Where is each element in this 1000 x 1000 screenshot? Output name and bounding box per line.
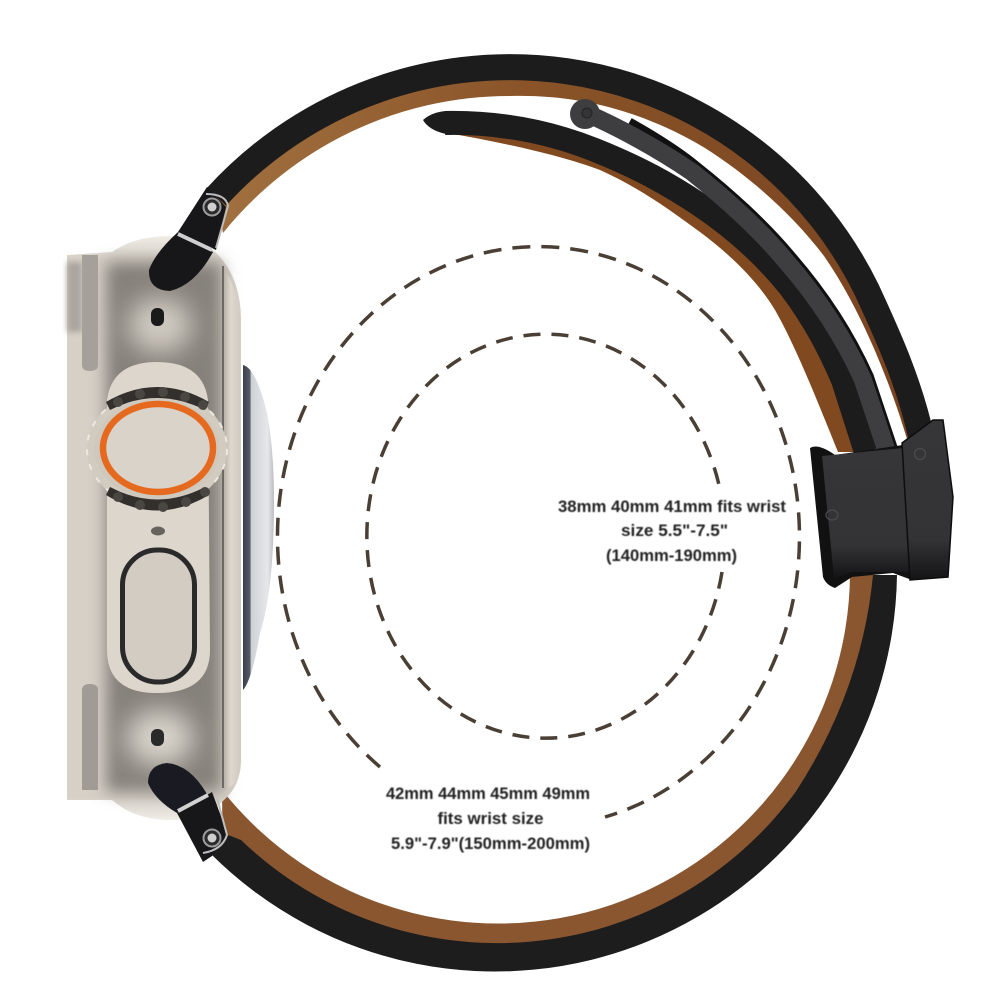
crown bottom dark rim — [106, 487, 209, 510]
watch case — [67, 236, 274, 820]
clasp right block — [902, 420, 953, 580]
lug paddle bottom — [148, 763, 207, 813]
speaker hole bottom — [151, 729, 164, 746]
orange ring — [103, 404, 213, 492]
size label: large watches: 5.9"-7.9"(150mm-200mm) — [391, 835, 590, 853]
bottom lug — [148, 763, 228, 862]
size label: small watches — [558, 498, 787, 565]
clasp dot right — [914, 448, 926, 460]
size label: small watches: 38mm 40mm 41mm fits wrist — [558, 498, 787, 516]
side button — [122, 550, 194, 682]
clasp dot left — [826, 510, 838, 520]
size label: small watches: (140mm-190mm) — [606, 547, 737, 565]
top strap leather lining — [216, 67, 925, 442]
lower light patch — [126, 710, 194, 766]
crown guard — [107, 362, 210, 693]
size label: large watches: fits wrist size — [438, 810, 544, 828]
bottom strap leather lining — [222, 575, 883, 959]
bolt top — [204, 198, 220, 216]
left side stripe lower — [82, 684, 98, 790]
guard dot — [151, 526, 165, 536]
case shading — [106, 262, 222, 792]
strap end top — [178, 187, 226, 250]
size label: large watches — [386, 785, 590, 853]
buckle tail leather lining — [445, 123, 866, 452]
left edge shade — [67, 262, 82, 332]
speaker hole top — [151, 308, 164, 326]
watch glass side — [243, 365, 274, 690]
bolt bottom — [204, 830, 220, 846]
folding clasp arm edge — [628, 126, 890, 452]
clasp left block — [810, 445, 912, 588]
silver stripe bottom — [178, 795, 208, 811]
right side rail — [224, 268, 241, 790]
silver edge bottom — [203, 798, 227, 853]
crown serrations — [87, 391, 227, 507]
top strap black outer — [216, 67, 922, 440]
clasp left face — [822, 448, 909, 578]
bottom strap black outer — [212, 575, 897, 972]
crown knurl bumps — [113, 387, 210, 512]
digital crown — [87, 387, 227, 512]
bolt centre top — [208, 202, 216, 212]
folding clasp arm — [570, 99, 888, 455]
clasp arm pivot — [582, 108, 592, 118]
strap end bottom — [177, 792, 228, 862]
crown base — [87, 390, 227, 508]
size label: small watches: size 5.5"-7.5" — [621, 522, 728, 540]
silver stripe top — [178, 234, 212, 250]
case body — [67, 236, 241, 820]
bolt centre bottom — [208, 834, 216, 842]
tail tip — [423, 111, 452, 135]
clasp — [810, 420, 953, 588]
silver edge top — [206, 194, 228, 248]
rail divider — [222, 266, 224, 788]
large wrist-size dashed circle — [277, 247, 799, 817]
size label: large watches: 42mm 44mm 45mm 49mm — [386, 785, 590, 803]
upper light patch — [128, 297, 192, 353]
crown top dark rim — [106, 387, 209, 410]
left side stripe upper — [82, 255, 98, 371]
buckle tail black strap — [423, 111, 866, 452]
top lug — [149, 187, 228, 291]
crown outer shade — [94, 399, 220, 499]
lug paddle top — [149, 232, 213, 291]
arm head — [570, 99, 600, 129]
small wrist-size dashed circle — [367, 334, 722, 738]
